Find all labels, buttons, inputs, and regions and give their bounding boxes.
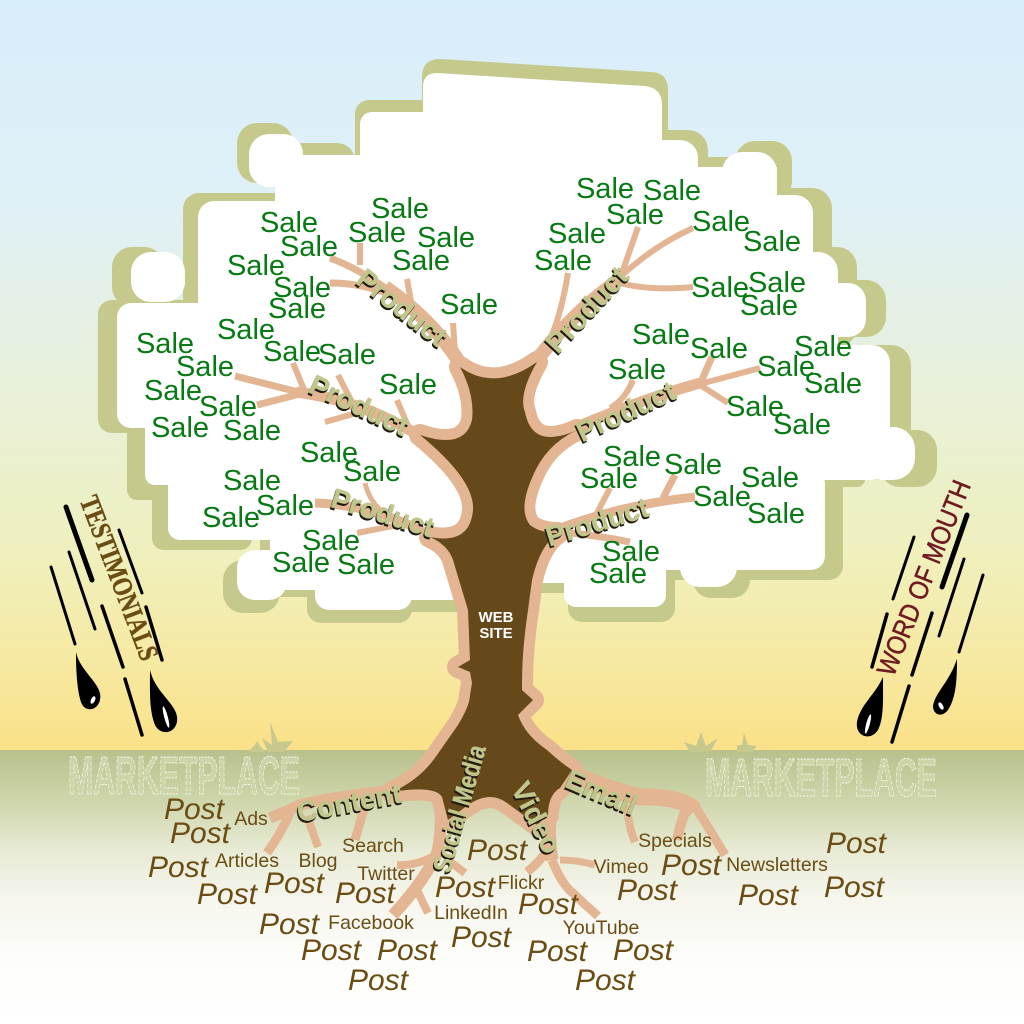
post words: Post — [826, 827, 888, 860]
sale words — [136, 173, 862, 590]
label: web site: WEB — [478, 609, 514, 626]
sale words: Sale — [300, 437, 358, 469]
channel labels: Vimeo — [594, 856, 649, 878]
sale words: Sale — [217, 314, 275, 346]
label: email root: Email — [561, 763, 642, 821]
channel labels: YouTube — [563, 917, 639, 939]
sale words: Sale — [256, 490, 314, 522]
sale words: Sale — [748, 267, 806, 299]
sale words: Sale — [348, 217, 406, 249]
sale words: Sale — [417, 222, 475, 254]
post words: Post — [617, 874, 679, 907]
sky background — [0, 0, 1024, 750]
rain: testimonials — [51, 491, 177, 735]
icon: rain drop — [150, 670, 177, 732]
post words: Post — [824, 871, 886, 904]
label: product branch lower right: Product — [542, 492, 652, 552]
sale words: Sale — [337, 549, 395, 581]
label: product branch upper right: Product — [540, 260, 634, 359]
branches — [235, 227, 760, 916]
sale words: Sale — [371, 193, 429, 225]
channel labels: LinkedIn — [434, 902, 508, 924]
sale words: Sale — [643, 175, 701, 207]
sale words: Sale — [440, 289, 498, 321]
sale words: Sale — [379, 369, 437, 401]
rain: word of mouth — [857, 476, 983, 742]
icon: grass tufts right — [684, 732, 757, 752]
channel labels: Blog — [298, 850, 338, 872]
post words: Post — [435, 871, 497, 904]
sale words: Sale — [741, 462, 799, 494]
label: product branch lower left: Product — [328, 483, 438, 543]
post words: Post — [575, 964, 637, 997]
label: testimonials: TESTIMONIALS — [73, 491, 164, 665]
sale words: Sale — [606, 199, 664, 231]
sale words: Sale — [302, 525, 360, 557]
sale words: Sale — [740, 290, 798, 322]
label: video root: Video — [505, 777, 567, 858]
sale words: Sale — [664, 449, 722, 481]
post words: Post — [377, 934, 439, 967]
post words: Post — [197, 878, 259, 911]
channel labels: Facebook — [328, 912, 414, 934]
icon: grass tufts left — [248, 722, 293, 752]
sale words: Sale — [757, 351, 815, 383]
sale words: Sale — [227, 250, 285, 282]
sale words: Sale — [603, 441, 661, 473]
sale words: Sale — [794, 331, 852, 363]
label: web site: SITE — [479, 625, 513, 642]
sale words: Sale — [260, 207, 318, 239]
post words: Post — [164, 793, 226, 826]
channel labels: Twitter — [357, 863, 415, 885]
post words: Post — [451, 921, 513, 954]
sale words: Sale — [692, 206, 750, 238]
sale words: Sale — [589, 558, 647, 590]
icon: rain drop — [933, 659, 957, 715]
post words: Post — [738, 879, 800, 912]
sale words: Sale — [726, 391, 784, 423]
sale words: Sale — [602, 536, 660, 568]
sale words: Sale — [280, 231, 338, 263]
sale words: Sale — [773, 409, 831, 441]
sale words: Sale — [747, 498, 805, 530]
sale words: Sale — [268, 293, 326, 325]
trunk — [392, 362, 577, 825]
post words: Post — [467, 834, 529, 867]
label: product branch middle right: Product — [571, 375, 680, 448]
sale words: Sale — [272, 547, 330, 579]
sale words: Sale — [632, 319, 690, 351]
sale words: Sale — [392, 245, 450, 277]
sale words: Sale — [804, 368, 862, 400]
sale words: Sale — [144, 375, 202, 407]
icon: rain drop — [857, 677, 883, 736]
sale words: Sale — [223, 415, 281, 447]
rain streaks right — [872, 515, 983, 742]
post words: Post — [335, 877, 397, 910]
label: product branch middle left: Product — [305, 369, 414, 442]
sale words: Sale — [318, 339, 376, 371]
label: word of mouth: WORD OF MOUTH — [871, 476, 977, 680]
sale words: Sale — [691, 272, 749, 304]
sale words: Sale — [136, 328, 194, 360]
post words: Post — [613, 934, 675, 967]
ground background — [0, 750, 1024, 1024]
label: social media root: Social Media — [427, 741, 492, 876]
sale words: Sale — [548, 218, 606, 250]
post words — [148, 793, 888, 997]
rain streaks left — [51, 507, 162, 735]
post words: Post — [527, 935, 589, 968]
sale words: Sale — [534, 245, 592, 277]
sale words: Sale — [743, 226, 801, 258]
tree — [235, 227, 760, 916]
post words: Post — [348, 964, 410, 997]
channel labels — [215, 808, 828, 939]
post words: Post — [518, 888, 580, 921]
channel labels: Search — [342, 835, 404, 857]
label: marketplace left: MARKETPLACE — [68, 746, 300, 806]
sale words: Sale — [273, 272, 331, 304]
label: content root: Content — [294, 777, 404, 828]
sale words: Sale — [580, 463, 638, 495]
channel labels: Articles — [215, 850, 279, 872]
sale words: Sale — [343, 456, 401, 488]
sale words: Sale — [202, 502, 260, 534]
sale words: Sale — [690, 333, 748, 365]
tree canopy white — [117, 73, 915, 610]
post words: Post — [170, 817, 232, 850]
post words: Post — [301, 934, 363, 967]
sale words: Sale — [693, 481, 751, 513]
icon: rain drop — [76, 652, 100, 709]
channel labels: Ads — [234, 808, 268, 830]
post words: Post — [661, 849, 723, 882]
label: web site — [478, 609, 514, 642]
post words: Post — [148, 851, 210, 884]
sale words: Sale — [199, 391, 257, 423]
channel labels: Flickr — [498, 872, 545, 894]
sale words: Sale — [176, 351, 234, 383]
channel labels: Newsletters — [726, 854, 828, 876]
tree canopy shadow — [98, 59, 937, 623]
sale words: Sale — [263, 336, 321, 368]
sale words: Sale — [151, 412, 209, 444]
sale words: Sale — [608, 354, 666, 386]
post words: Post — [259, 908, 321, 941]
label: product branch upper left: Product — [351, 263, 453, 352]
sale words: Sale — [223, 465, 281, 497]
sale words: Sale — [576, 173, 634, 205]
post words: Post — [264, 867, 326, 900]
channel labels: Specials — [638, 830, 712, 852]
